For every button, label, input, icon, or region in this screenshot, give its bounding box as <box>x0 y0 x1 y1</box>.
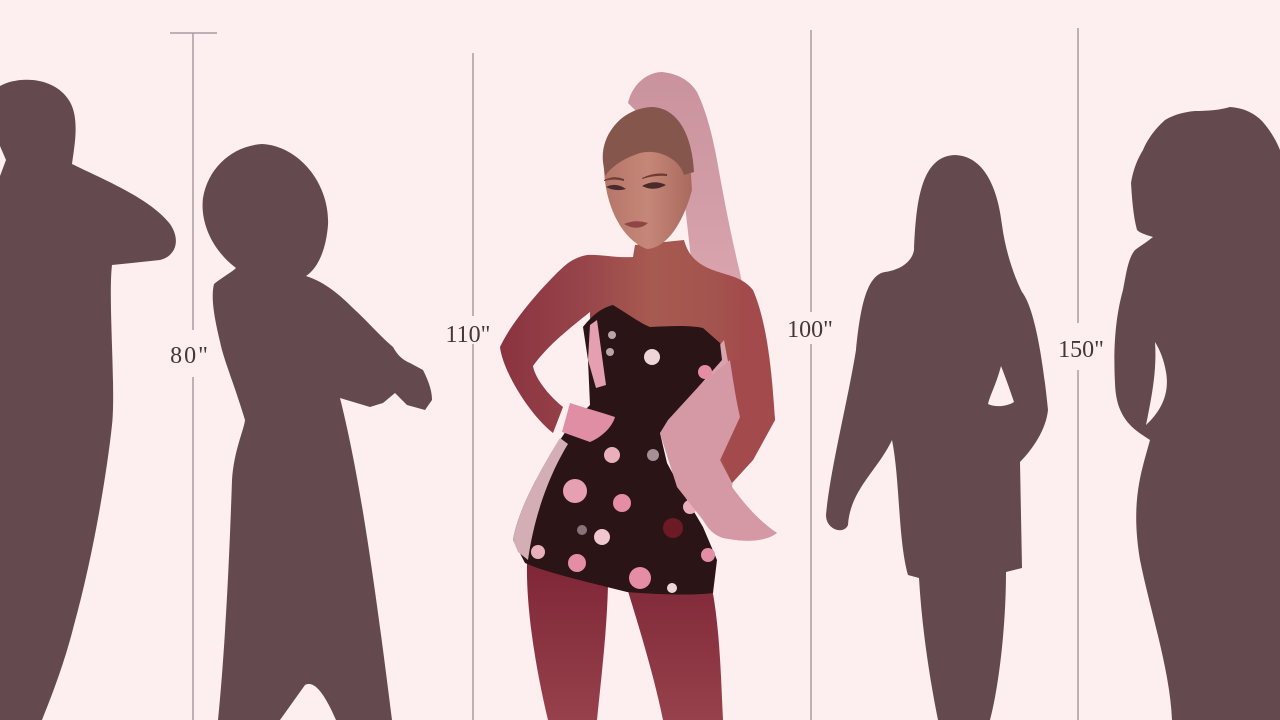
silhouette: second figure <box>203 144 432 720</box>
hair top <box>603 107 694 176</box>
dress side trim <box>513 438 568 560</box>
pink bow at waist <box>562 403 615 442</box>
head <box>604 135 692 249</box>
central figure: woman in floral dress <box>500 72 777 720</box>
height ruler: 100 inches: 100" <box>787 317 833 343</box>
ponytail <box>628 72 777 541</box>
dress <box>513 305 722 595</box>
height ruler: 110 inches: 110" <box>446 322 490 348</box>
gap: arm and waist of fourth figure <box>988 366 1014 406</box>
eyes, nose and lips <box>604 174 667 228</box>
height ruler: 80 inches <box>170 33 217 720</box>
height ruler: 150 inches: 150" <box>1058 337 1104 363</box>
arms and torso skin <box>500 240 775 483</box>
gap: arm and waist of far right figure <box>1146 342 1167 425</box>
hair over hip <box>660 360 777 541</box>
legs <box>527 562 723 720</box>
dress flowers <box>531 331 715 593</box>
silhouette: far left figure <box>0 80 176 720</box>
silhouette: fourth figure <box>826 155 1048 720</box>
height ruler: 80 inches: 80" <box>170 343 210 369</box>
silhouette: far right figure <box>1114 107 1280 720</box>
pink side panel <box>588 320 606 388</box>
forearm <box>722 360 775 483</box>
